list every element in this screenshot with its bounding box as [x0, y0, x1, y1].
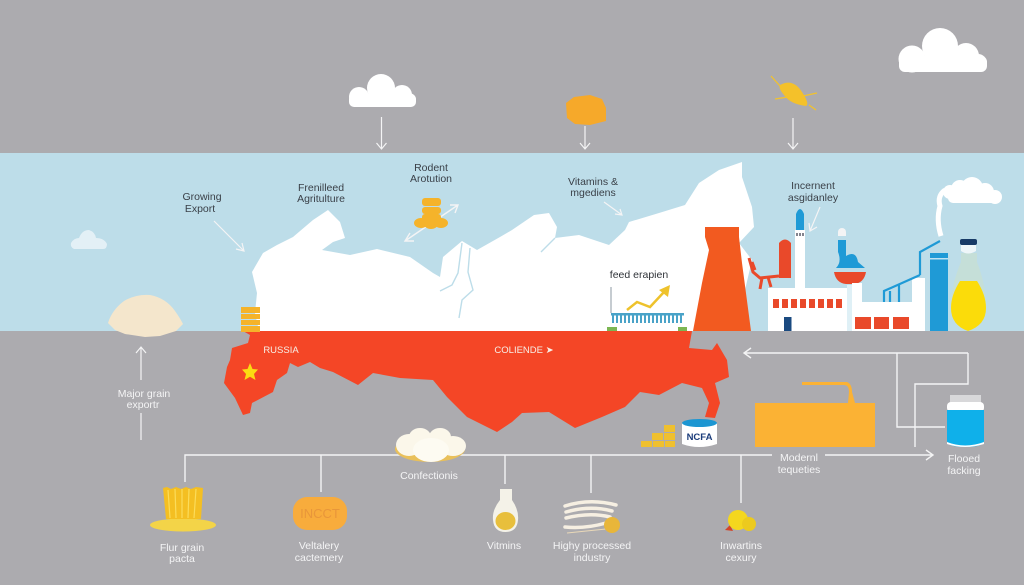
- label: Coliende: COLIENDE ➤: [494, 345, 554, 356]
- diagram: horizontal distribution line: [185, 450, 933, 503]
- icon: coin pile at border: [241, 307, 260, 332]
- red tank: [779, 240, 791, 278]
- arrow: grain down: [580, 126, 590, 149]
- text: flour grain pasta: pacta: [169, 553, 195, 565]
- icon: can: NCFA: [687, 432, 713, 443]
- text: fertilized agriculture: Agritulture: [297, 193, 345, 205]
- text: confectionis: Confectionis: [400, 470, 458, 482]
- text: flood packing: facking: [947, 465, 981, 477]
- icon: small cloud: [71, 230, 107, 249]
- icon: golden grain cluster: [566, 95, 606, 125]
- text: flour grain pasta: Flur grain: [160, 542, 204, 554]
- text: inwartins: cexury: [726, 552, 757, 564]
- icon: processed stack: [565, 502, 620, 533]
- icon: insect badge: [293, 497, 347, 530]
- text: veterinary: cactemery: [295, 552, 344, 564]
- text: increment: [788, 180, 839, 204]
- icon: flask: [493, 489, 518, 532]
- text: major grain export: [118, 388, 170, 411]
- line: from export text: [140, 413, 142, 440]
- text: vitamins and ingredients: [568, 176, 618, 199]
- text: veterinary: Veltalery: [299, 540, 340, 552]
- second building: [852, 278, 925, 331]
- blue vessel on bowl: [838, 228, 846, 236]
- chimney: [795, 230, 805, 290]
- arrow: return line to map: [744, 348, 968, 447]
- arrow: export: [214, 221, 244, 251]
- text: rodent arotution: [410, 162, 452, 185]
- blue tower: [930, 253, 948, 331]
- text: rodent arotution: Rodent: [414, 162, 448, 174]
- illustration: factory: [749, 177, 1002, 331]
- panel: sky band: [0, 153, 1024, 331]
- map: southern Russia in red: [224, 331, 729, 432]
- icon: insect badge: INCCT: [300, 506, 340, 521]
- text: fertilized agriculture: Frenilleed: [298, 182, 344, 194]
- text: increment: Incernent: [791, 180, 835, 192]
- text: inwartins: Inwartins: [720, 540, 762, 552]
- icon: grain leaf: [771, 76, 817, 110]
- text: modern industries: Modernl: [780, 452, 818, 464]
- icon: lemons: [725, 510, 756, 531]
- icon: jar: [947, 395, 984, 447]
- text: highly processed: [553, 540, 631, 564]
- text: highly processed: Highy processed: [553, 540, 631, 552]
- icon: yellow box: [755, 382, 875, 447]
- icon: can: [682, 419, 717, 447]
- label: Russia: RUSSIA: [263, 345, 299, 356]
- text: rodent arotution: Arotution: [410, 173, 452, 185]
- text: vitamins: Vitmins: [487, 540, 521, 552]
- text: highly processed: industry: [574, 552, 611, 564]
- smoke: [938, 177, 1002, 236]
- text: vitamins and ingredients: Vitamins &: [568, 176, 618, 188]
- text: vitamins and ingredients: mgediens: [570, 187, 616, 199]
- arrow: leaf down: [788, 118, 798, 149]
- icon: oil bottle: [951, 239, 986, 331]
- text: growing export: Growing: [182, 191, 222, 203]
- map: northern Russia in white: [252, 162, 754, 331]
- text: flour grain pasta: [160, 542, 204, 565]
- text: major grain export: Major grain: [118, 388, 170, 400]
- label: feed: feed erapien: [610, 269, 668, 281]
- arrow: double headed: [405, 205, 458, 241]
- text: modern industries: tequeties: [778, 464, 820, 476]
- icon: top right cloud: [898, 28, 987, 72]
- text: major grain export: exportr: [127, 399, 160, 411]
- icon: coin stack: [414, 198, 448, 229]
- arrow: vitamins: [604, 202, 622, 215]
- text: growing export: Export: [185, 203, 215, 215]
- icon: confectionery: [395, 428, 466, 462]
- text: growing export: [182, 191, 222, 215]
- text: veterinary: [295, 540, 344, 564]
- icon: star: [242, 363, 258, 380]
- text: fertilized agriculture: [297, 182, 345, 205]
- chart: feed growth: [607, 269, 687, 331]
- arrow: cloud down: [376, 117, 386, 149]
- icon: rice pile: [108, 295, 183, 337]
- arrow: up to rice: [136, 347, 146, 380]
- arrow: increment: [809, 207, 820, 231]
- icon: gold cubes: [641, 425, 675, 447]
- text: inwartins: [720, 540, 762, 564]
- text: increment: asgidanley: [788, 192, 839, 204]
- text: flood packing: [947, 453, 981, 477]
- main building: [768, 288, 847, 331]
- pipes: [884, 241, 940, 302]
- text: modern industries: [778, 452, 820, 476]
- icon: cooling tower: [693, 227, 751, 331]
- icon: top left cloud: [349, 74, 416, 107]
- text: flood packing: Flooed: [948, 453, 980, 465]
- icon: flour grain: [150, 487, 216, 532]
